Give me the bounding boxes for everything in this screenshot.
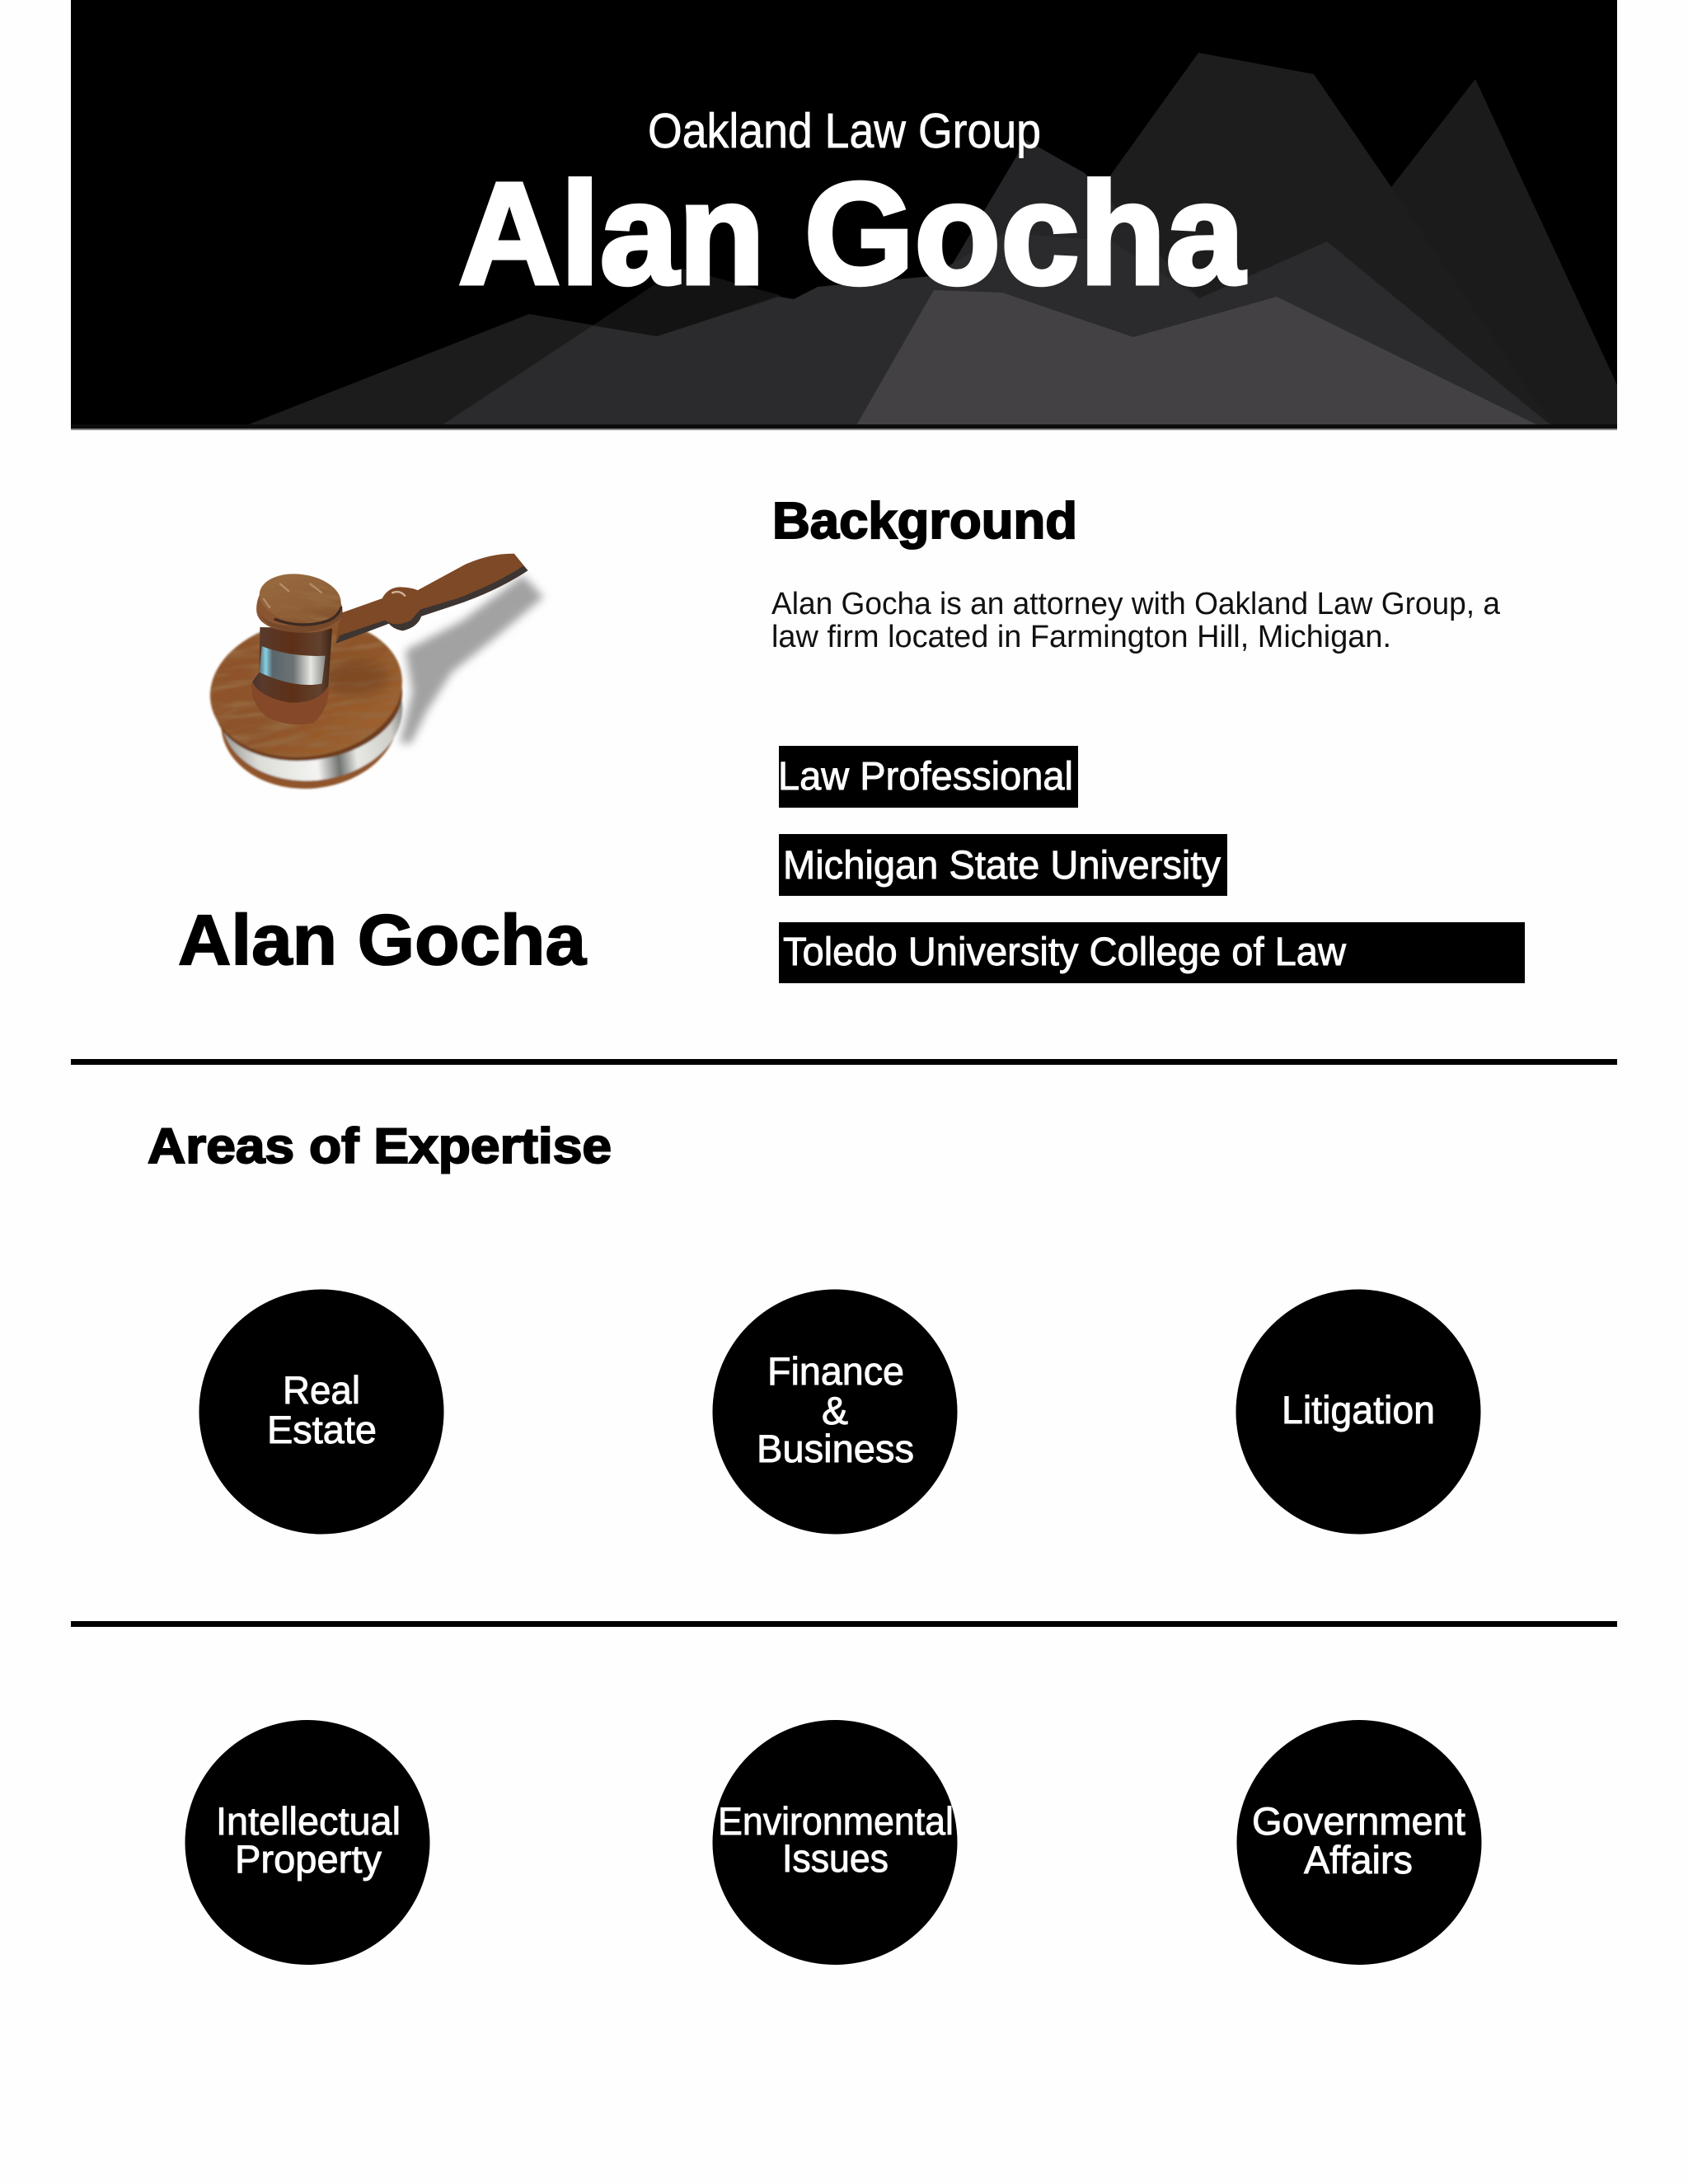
circle: government affairs: Government [1252,1799,1465,1843]
circle: government affairs [1236,1720,1482,1965]
name caption under gavel: Alan Gocha [178,901,587,980]
header banner [71,0,1622,430]
circle: government affairs: Affairs [1304,1838,1413,1882]
circle: real estate [199,1289,443,1535]
tag: michigan state university [779,834,1227,896]
circle: real estate: Real [283,1368,360,1412]
gavel head [252,569,345,724]
circle: intellectual property: Property [235,1837,382,1881]
background paragraph: law firm located in Farmington Hill, Michigan. [771,620,1391,654]
circle: finance and business: Business [757,1427,914,1470]
mountain: far left ridge [242,295,780,429]
circle: finance and business: & [822,1389,848,1432]
circle: finance and business [712,1289,958,1535]
tag: toledo university college of law: Toledo University College of Law [783,930,1346,974]
background paragraph [771,587,1501,654]
circle: real estate: Estate [267,1408,377,1451]
banner title: Alan Gocha [458,153,1245,315]
mountain: tall back peak [1109,53,1391,298]
circle: environmental issues [712,1720,958,1965]
background heading: Background [772,493,1077,550]
circle: intellectual property: Intellectual [216,1799,401,1843]
panel: background [771,493,1525,983]
circle: environmental issues: Issues [782,1836,889,1880]
tag: michigan state university: Michigan State University [783,844,1221,888]
circle: finance and business: Finance [767,1349,904,1393]
circle: litigation [1236,1289,1480,1535]
tag: law professional: Law Professional [778,755,1073,799]
tag: toledo university college of law [779,922,1525,983]
gavel shadow [400,575,543,743]
sound block base [201,608,411,797]
circle: intellectual property [185,1720,430,1965]
firm name: Oakland Law Group [648,104,1041,158]
mountain: front layer [856,290,1541,427]
mountain: middle layer [439,232,1553,427]
mountain: centre peak [953,140,1198,297]
background paragraph: Alan Gocha is an attorney with Oakland Law Group, a [771,587,1501,621]
mountain: far right peak [1391,79,1617,424]
areas of expertise heading: Areas of Expertise [148,1118,612,1174]
circle: litigation: Litigation [1282,1388,1435,1432]
circle: environmental issues: Environmental [718,1799,954,1843]
mountains backdrop [71,53,1622,429]
mountain: dark band behind the title [593,268,780,336]
gavel handle [335,554,528,644]
icon: gavel on sound block [201,554,543,797]
